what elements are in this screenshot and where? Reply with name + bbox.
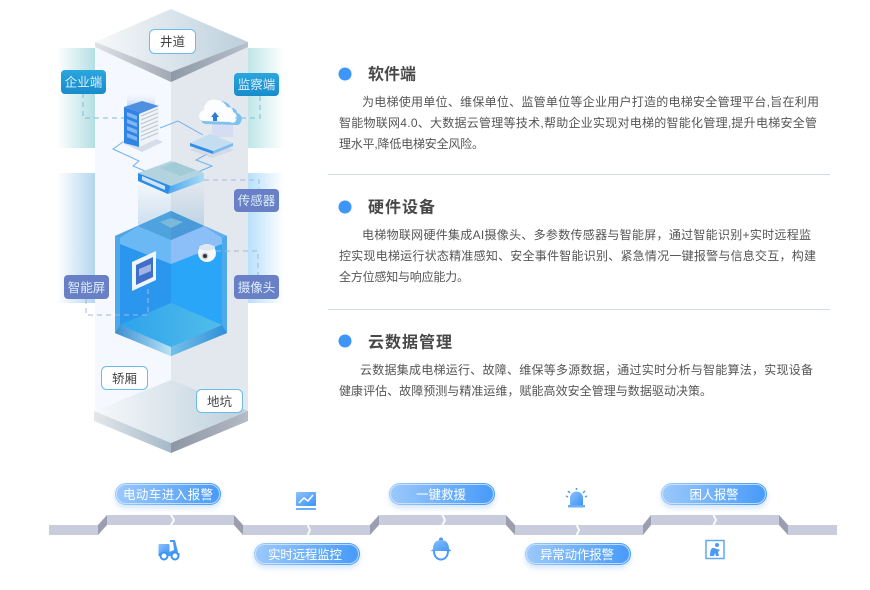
body text: 云数据集成电梯运行、故障、维保等多源数据，通过实时分析与智能算法，实现设备: [360, 362, 813, 377]
timeline track: [49, 508, 837, 543]
label: 井道: 井道: [160, 35, 185, 49]
pill: 电动车进入报警: [115, 483, 221, 505]
bullet: [338, 200, 352, 214]
pill: 异常动作报警: 异常动作报警: [540, 547, 614, 562]
body text: [339, 227, 816, 284]
pill: 一键救援: [389, 483, 495, 505]
icon: camera: [198, 244, 216, 262]
icon: trapped person: [706, 540, 724, 558]
icon: server rack: [120, 92, 163, 152]
body text: 控实现电梯运行状态精准感知、安全事件智能识别、紧急情况一键报警与信息交互，构建: [339, 248, 816, 263]
icon: network switch: [138, 161, 204, 194]
label: 地坑: [196, 390, 242, 412]
section: 软件端: [338, 66, 819, 151]
label: 井道: [150, 30, 196, 54]
label: 地坑: 地坑: [207, 394, 232, 409]
body text: 健康评估、故障预测与精准运维，赋能高效安全管理与数据驱动决策。: [339, 383, 712, 398]
bullet: [338, 334, 352, 348]
shaft roof: [95, 9, 248, 82]
label: 轿厢: [102, 366, 148, 390]
hoist column: [138, 185, 204, 230]
icon: helmet: [430, 538, 452, 560]
pill: 电动车进入报警: 电动车进入报警: [123, 487, 213, 502]
body text: 理水平,降低电梯安全风险。: [339, 136, 484, 151]
heading: 硬件设备: [368, 198, 435, 216]
heading: 云数据管理: [368, 332, 452, 352]
label: 轿厢: 轿厢: [112, 371, 137, 386]
icon: gateway box: [190, 134, 234, 158]
label: 监察端: [234, 73, 279, 96]
pill: 困人报警: [661, 483, 767, 505]
label: 传感器: 传感器: [238, 193, 276, 208]
body text: 电梯物联网硬件集成AI摄像头、多参数传感器与智能屏，通过智能识别+实时远程监: [362, 227, 811, 242]
pill: 一键救援: 一键救援: [416, 487, 466, 502]
side glow bands: [57, 48, 284, 303]
icon: alarm siren: [566, 488, 587, 508]
elevator car: [115, 211, 227, 356]
label: 摄像头: [234, 275, 279, 299]
label: 监察端: 监察端: [238, 78, 275, 92]
label: 企业端: [61, 70, 106, 94]
icon: chart screen: [296, 492, 316, 510]
section: 硬件设备: [338, 198, 816, 284]
body text: [339, 362, 813, 398]
label: 传感器: [234, 189, 279, 212]
panel: elevator shaft diagram: [57, 9, 284, 453]
pit floor: [94, 380, 248, 453]
body text: 全方位感知与响应能力。: [339, 269, 469, 284]
pill: 实时远程监控: 实时远程监控: [268, 547, 342, 562]
label: 企业端: 企业端: [65, 74, 102, 90]
heading: 软件端: [368, 66, 416, 84]
icon: scooter: [158, 540, 180, 560]
network lines: [113, 121, 212, 172]
body text: [339, 94, 819, 151]
pill: 异常动作报警: [525, 543, 631, 565]
shaft walls: [95, 45, 248, 425]
pill: 困人报警: 困人报警: [690, 487, 738, 502]
dashed connectors: [83, 93, 260, 315]
body text: 为电梯使用单位、维保单位、监管单位等企业用户打造的电梯安全管理平台,旨在利用: [362, 94, 819, 109]
bullet: [338, 68, 352, 80]
section: 云数据管理: [338, 332, 813, 398]
icon: smart screen: [132, 251, 156, 291]
label: 摄像头: 摄像头: [238, 280, 275, 295]
label: 智能屏: [64, 275, 109, 299]
body text: 智能物联网4.0、大数据云管理等技术,帮助企业实现对电梯的智能化管理,提升电梯安全管: [339, 115, 817, 130]
label: 智能屏: 智能屏: [68, 280, 105, 295]
icon: cloud: [199, 100, 242, 137]
pill: 实时远程监控: [254, 543, 360, 565]
